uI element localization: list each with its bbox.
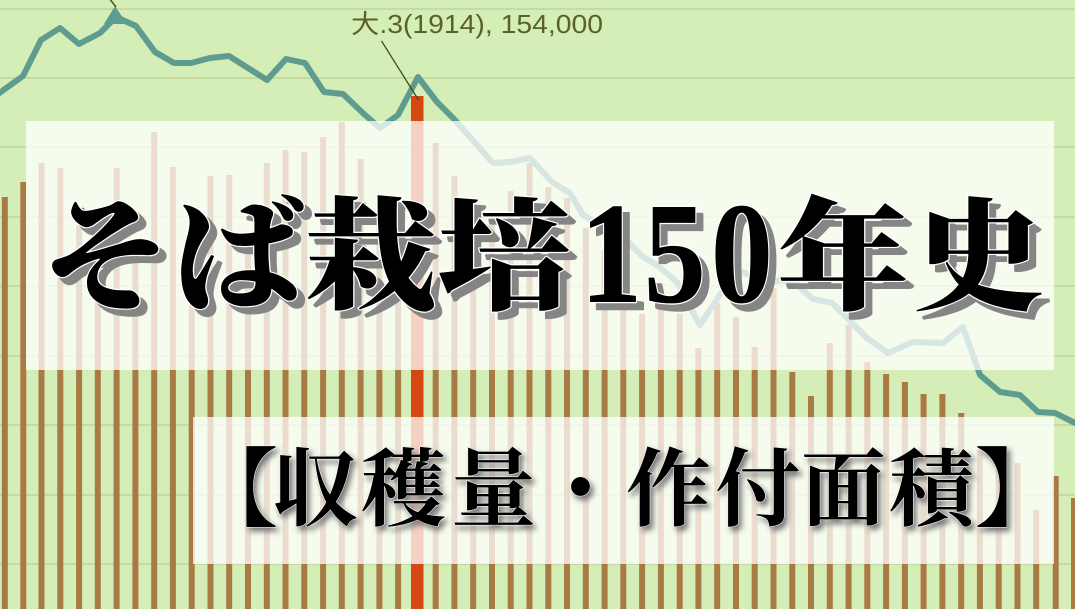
panel: subtitle backdrop bbox=[193, 417, 1054, 564]
title: 150 bbox=[580, 173, 773, 334]
callout leader: peak bbox=[109, 0, 116, 7]
callout leader: 1914 bbox=[382, 41, 418, 100]
line chart: cultivated area bbox=[0, 17, 1075, 424]
highlighted bar: 1914 bbox=[411, 96, 424, 609]
callout label: 大.3(1914), 154,000 bbox=[351, 9, 603, 39]
peak marker bbox=[104, 6, 127, 24]
subtitle: 【収穫量・作付面積】 bbox=[193, 422, 1060, 544]
panel: title backdrop bbox=[26, 121, 1054, 370]
bar chart: harvest bars bbox=[2, 122, 1075, 609]
title: 年史 bbox=[777, 159, 1044, 336]
title bbox=[40, 159, 1044, 336]
title: そば栽培 bbox=[40, 159, 570, 336]
